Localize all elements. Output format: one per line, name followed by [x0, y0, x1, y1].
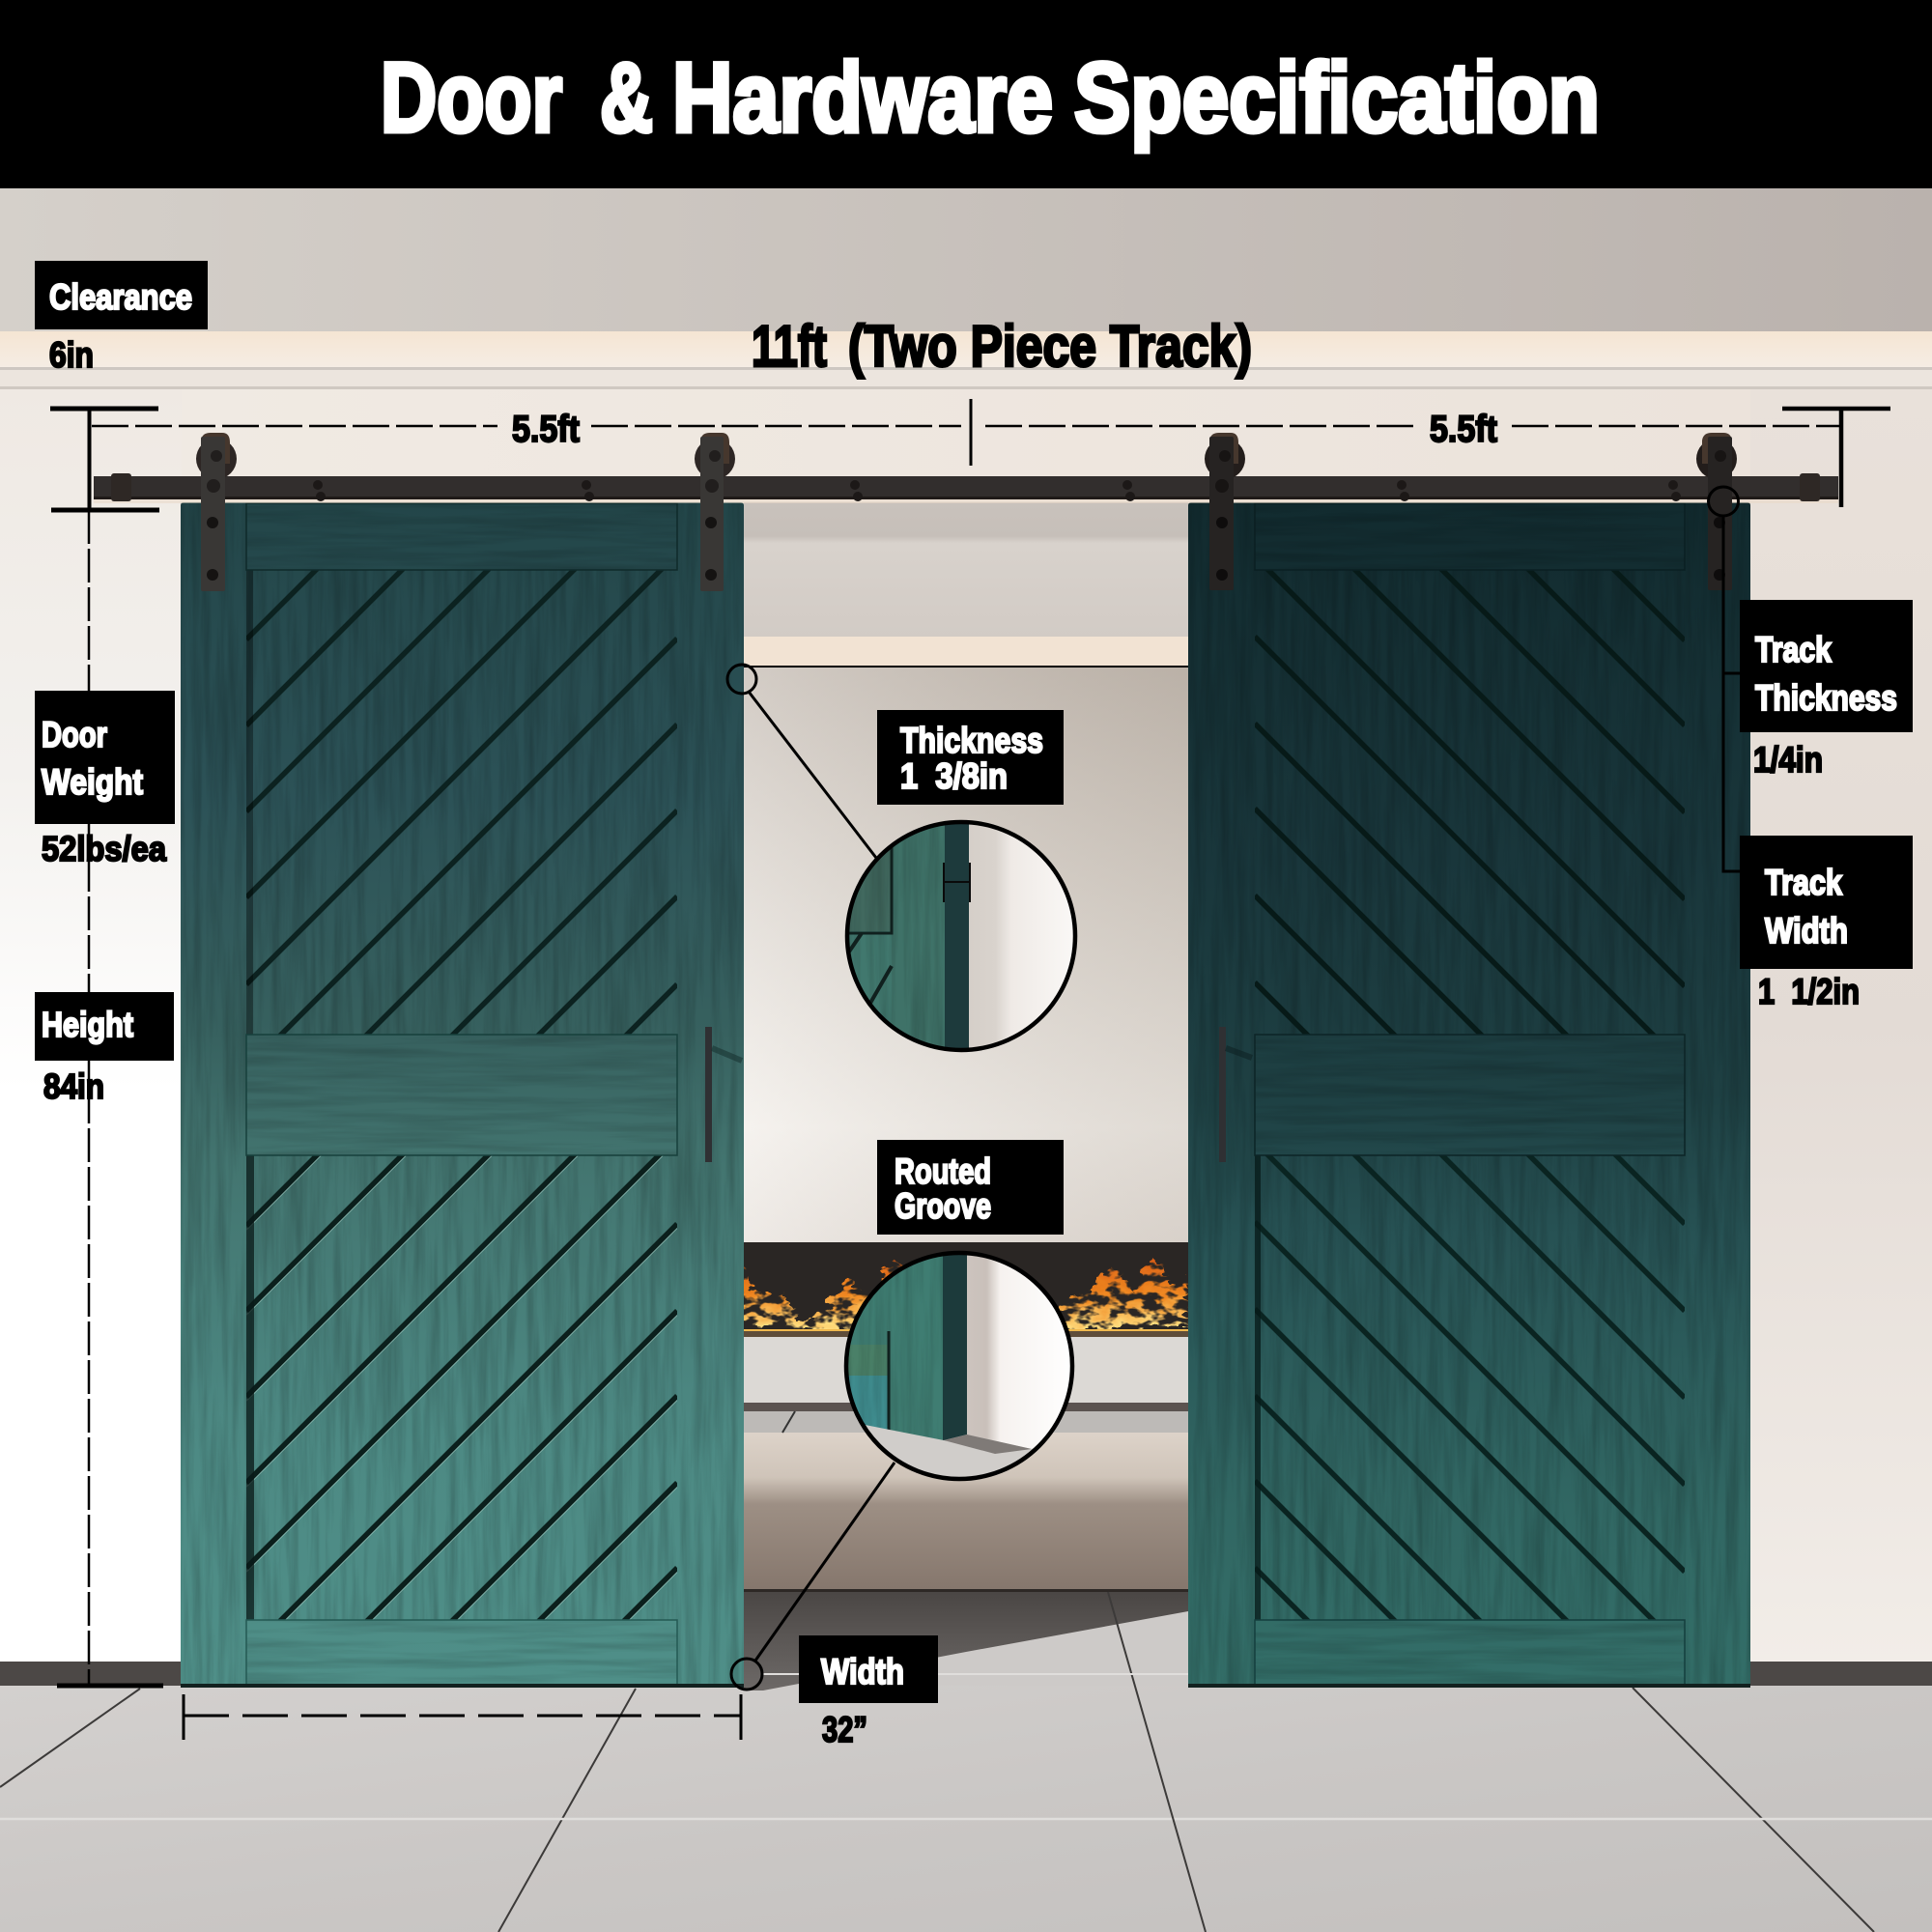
label: track length: [752, 314, 1252, 379]
label: routed groove: Groove: [895, 1186, 991, 1226]
flames: fireplace: [744, 1256, 1188, 1329]
label: clearance: 6in: [49, 335, 94, 375]
track bolts: [313, 480, 1681, 501]
sliding track rail: [94, 473, 1838, 503]
callout: door top thickness pointer: [727, 665, 1188, 858]
label: track length: (Two Piece Track): [848, 314, 1252, 379]
label: track thickness: [1740, 600, 1913, 780]
right door: middle rail: [1255, 1035, 1685, 1155]
label: clearance: [35, 261, 208, 375]
hanger 1: [196, 433, 237, 591]
label: height: 84in: [43, 1066, 104, 1106]
callout: track pointer: [1708, 487, 1740, 871]
dimension: right track end bracket: [1782, 409, 1890, 507]
label: routed groove: [877, 1140, 1064, 1235]
right door: [1188, 502, 1750, 1688]
title: &: [600, 43, 653, 153]
left door: [181, 502, 744, 1688]
title band: [0, 0, 1932, 188]
title: Door: [381, 43, 562, 153]
right door: top rail: [1255, 503, 1685, 570]
magnifier: routed groove detail: [845, 1253, 1073, 1483]
dimension: door width: [184, 1694, 741, 1740]
title: Specification: [1074, 43, 1600, 153]
label: track thickness: Track: [1755, 630, 1832, 669]
right door: handle: [1219, 1027, 1252, 1162]
label: track thickness: 1/4in: [1753, 740, 1823, 780]
label: thickness: [877, 710, 1064, 805]
label: track width: Track: [1765, 863, 1842, 902]
label: width: [799, 1635, 938, 1749]
title: [381, 43, 1600, 153]
label: thickness: 1 3/8in: [900, 756, 1008, 796]
label: height: [35, 992, 174, 1106]
label: 5.5ft right: 5.5ft: [1430, 409, 1497, 450]
room seen through the opening between the doors: [744, 502, 1206, 1932]
magnifier: door thickness detail: [847, 822, 1075, 1050]
title: Hardware: [672, 43, 1053, 153]
right door: bottom rail: [1255, 1620, 1685, 1686]
track stoppers: [111, 473, 1820, 501]
hanger 2: [695, 433, 735, 591]
left door: lower diagonal grooves: [246, 1155, 677, 1619]
left door: upper diagonal grooves: [246, 570, 677, 1034]
label: track length: 11ft: [752, 314, 827, 379]
right door: upper diagonal grooves: [1255, 570, 1685, 1034]
callout: door width pointer: [731, 1463, 895, 1690]
hanger 4: [1696, 433, 1737, 590]
label: track width: 1 1/2in: [1758, 972, 1860, 1011]
left door: middle rail: [246, 1035, 677, 1155]
label: thickness: Thickness: [900, 721, 1043, 760]
label: clearance: Clearance: [49, 277, 192, 317]
dimension: clearance bracket and overall height: [50, 409, 163, 1686]
label: height: Height: [42, 1005, 133, 1044]
label: door weight: 52lbs/ea: [42, 829, 167, 868]
hanger 3: [1205, 433, 1245, 590]
label: track width: Width: [1765, 911, 1848, 951]
label: 5.5ft left: 5.5ft: [512, 409, 580, 450]
left door: top rail: [246, 503, 677, 570]
label: track thickness: Thickness: [1755, 678, 1897, 718]
label: track width: [1740, 836, 1913, 1011]
label: routed groove: Routed: [895, 1151, 991, 1191]
label: width: 32”: [822, 1710, 867, 1749]
label: door weight: Door: [42, 715, 107, 754]
right door: lower diagonal grooves: [1255, 1155, 1685, 1619]
dimension: track centre tick: [970, 399, 972, 466]
left door: bottom rail: [246, 1620, 677, 1686]
label: width: Width: [821, 1652, 904, 1691]
label: door weight: [35, 691, 175, 868]
label: door weight: Weight: [42, 762, 143, 802]
left door: handle: [705, 1027, 742, 1162]
